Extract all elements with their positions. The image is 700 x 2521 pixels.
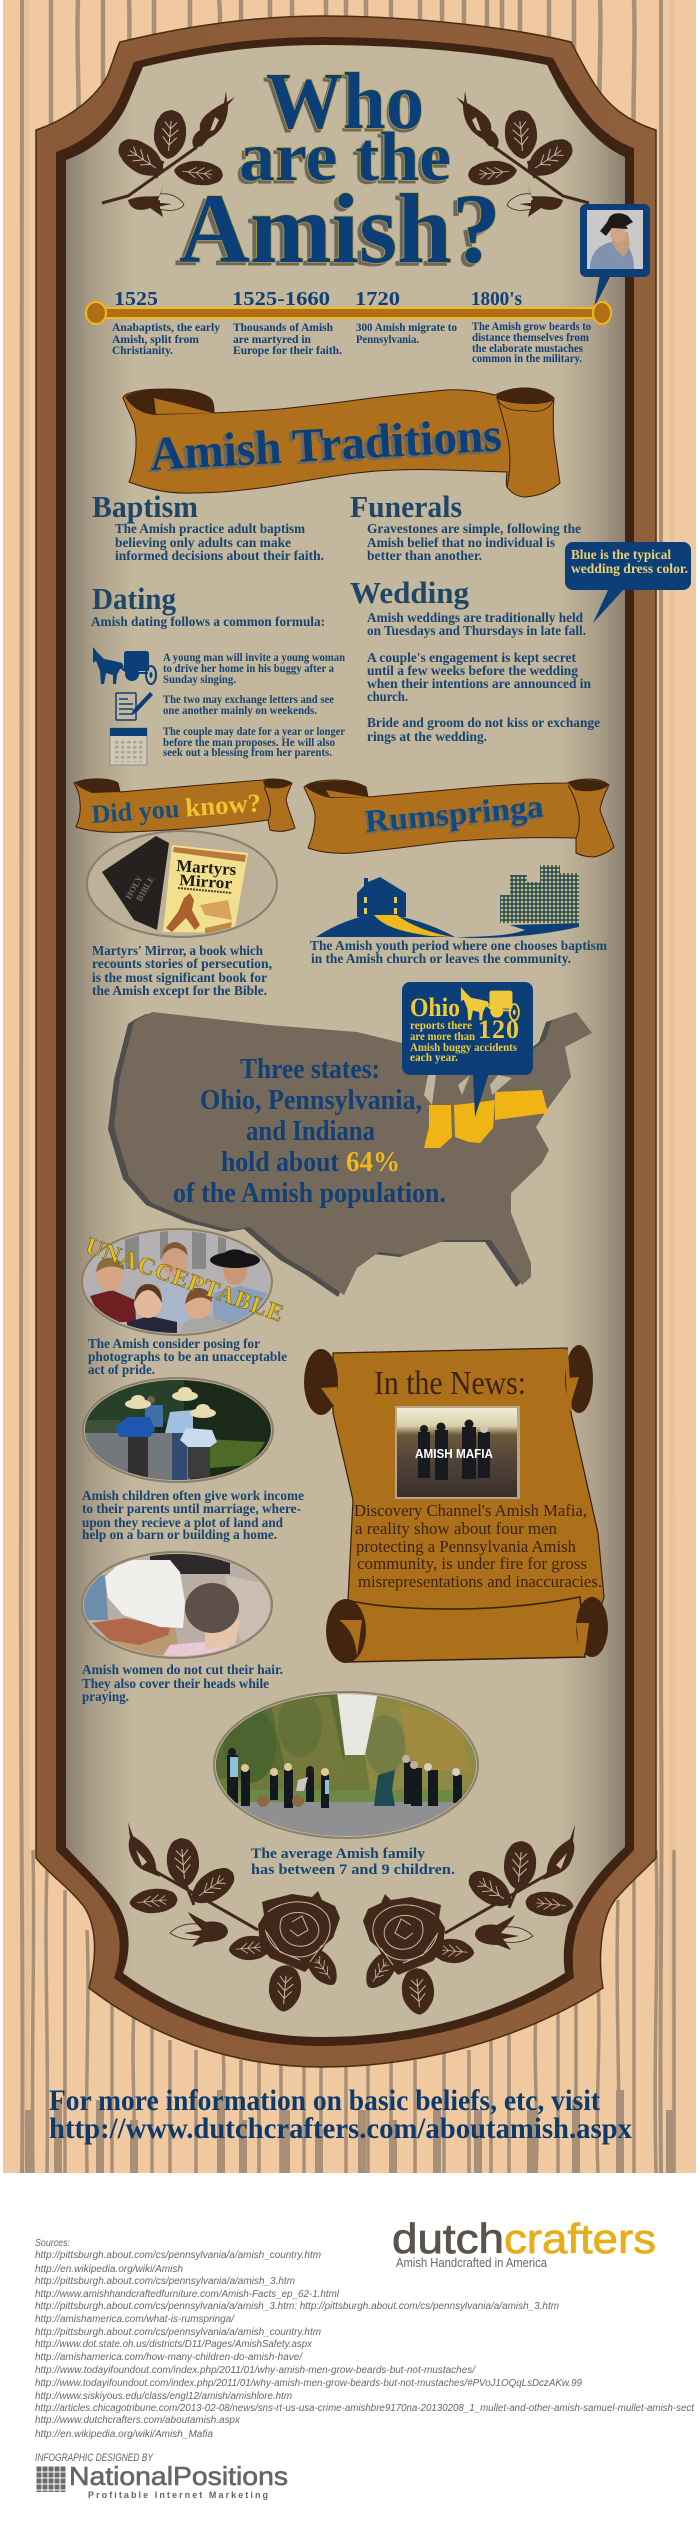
text block: hair: Amish women do not cut their hair.: [82, 1663, 283, 1678]
dating step 2: The two may exchange letters and see: [163, 692, 335, 706]
timeline event 1720: [355, 288, 457, 346]
scroll body text: a reality show about four men: [355, 1519, 557, 1538]
callout: blue wedding dress: [565, 542, 691, 623]
photo: Holy Bible and Martyrs' Mirror: Mirror: [179, 872, 233, 893]
text block: sources: http://www.amishhandcraftedfurniture.com/Amish-Facts_ep_62-1.html: [35, 2289, 340, 2300]
dating step 3: The couple may date for a year or longer: [163, 724, 346, 738]
timeline event 1800's: distance themselves from: [472, 330, 589, 344]
timeline event 1525: 1525: [114, 288, 158, 310]
panel: wooden sign frame: [36, 16, 656, 2067]
dating step 1: A young man will invite a young woman: [163, 650, 345, 664]
panel: In the News scroll: [304, 1345, 608, 1663]
text block: Wedding: A couple's engagement is kept secret: [367, 651, 576, 666]
callout: blue wedding dress: Blue is the typical: [571, 548, 671, 563]
photo: prayer covering: [82, 1552, 272, 1660]
text block: sources: http://en.wikipedia.org/wiki/Amish: [35, 2264, 183, 2275]
timeline event 1525: Amish, split from: [112, 332, 199, 346]
text block: Martyrs' Mirror: [92, 944, 272, 999]
timeline event 1800's: The Amish grow beards to: [472, 319, 591, 333]
heading: Did you know?: [90, 788, 262, 829]
timeline event 1525: [112, 288, 220, 357]
dating step 1: to drive her home in his buggy after a: [163, 661, 334, 675]
heading: Amish Traditions: Amish Traditions: [146, 411, 500, 483]
icon: left rose sprig ornament: [102, 91, 235, 217]
timeline event 1525-1660: Thousands of Amish: [233, 320, 333, 334]
callout: blue wedding dress: wedding dress color.: [571, 562, 688, 577]
text block: sources: http://www.siskiyous.edu/class/engl12/amish/amishlore.htm: [35, 2391, 292, 2402]
photo: Holy Bible and Martyrs' Mirror: BIBLE: [134, 874, 156, 903]
text block: sources: http://pittsburgh.about.com/cs/pennsylvania/a/amish_country.htm: [35, 2327, 321, 2338]
photo: Amish Mafia: [395, 1406, 520, 1499]
title: Amish?: [175, 176, 497, 287]
text block: Wedding: on Tuesdays and Thursdays in late fall.: [367, 624, 586, 639]
icon: right rose branch: [359, 1825, 584, 2016]
scroll body text: community, is under fire for gross: [357, 1554, 587, 1573]
timeline event 1800's: 1800's: [471, 288, 522, 310]
text block: family size: The average Amish family: [251, 1846, 426, 1862]
highlighted states: [424, 1090, 548, 1148]
scroll body text: [354, 1501, 602, 1591]
dating step 1: [163, 650, 345, 686]
text block: sources: [35, 2238, 695, 2440]
text block: Wedding: until a few weeks before the wedding: [367, 664, 578, 679]
map caption: Ohio, Pennsylvania,: [200, 1084, 422, 1116]
photo: Holy Bible and Martyrs' Mirror: [87, 831, 277, 937]
heading: Rumspringa: Rumspringa: [363, 788, 545, 839]
text block: Baptism: informed decisions about their faith.: [115, 549, 324, 564]
banner: Rumspringa: [304, 779, 614, 857]
text block: Wedding: Wedding: [350, 575, 469, 610]
dating step 3: seek out a blessing from her parents.: [163, 745, 332, 759]
text block: children income: to their parents until marriage, where-: [82, 1502, 301, 1517]
timeline: [86, 288, 611, 365]
logo: dutchcrafters: dutch: [392, 2215, 504, 2262]
timeline event 1525-1660: are martyred in: [233, 332, 311, 346]
text block: photographs: act of pride.: [88, 1363, 155, 1378]
text block: Wedding: rings at the wedding.: [367, 730, 487, 745]
text block: children income: upon they recieve a plot of land and: [82, 1516, 283, 1531]
text block: sources: http://www.todayifoundout.com/index.php/2011/01/why-amish-men-grow-beards-but-not-mustaches/#PVoJ1OQqLsDczAKw.99: [35, 2378, 582, 2389]
timeline event 1720: 1720: [355, 288, 400, 310]
text block: sources: http://www.dot.state.oh.us/districts/D11/Pages/AmishSafety.aspx: [35, 2339, 313, 2350]
icon: house on hill and city: [316, 865, 579, 938]
credit: National Positions: Profitable Internet Marketing: [88, 2490, 268, 2500]
text block: sources: http://articles.chicagotribune.com/2013-02-08/news/sns-rt-us-usa-crime-amishbre9170na-20130208_1_mullet-and-other-amish-samuel-mullet-amish-sect: [35, 2403, 695, 2414]
callout: Ohio buggy accidents: [402, 982, 533, 1117]
text block: Dating: Dating: [92, 581, 176, 616]
text block: Martyrs' Mirror: the Amish except for the Bible.: [92, 984, 267, 999]
footer call to action: http://www.dutchcrafters.com/aboutamish.aspx: [49, 2112, 632, 2145]
text block: Martyrs' Mirror: recounts stories of persecution,: [92, 957, 272, 972]
text block: Funerals: Funerals: [350, 489, 462, 524]
text block: photographs: photographs to be an unacceptable: [88, 1350, 287, 1365]
text block: Baptism: The Amish practice adult baptism: [115, 522, 305, 537]
footer call to action: [49, 2084, 632, 2145]
text block: Rumspringa: The Amish youth period where one chooses baptism: [310, 939, 607, 954]
text block: sources: http://en.wikipedia.org/wiki/Amish_Mafia: [35, 2429, 213, 2440]
icon: yellow buggy: [461, 987, 519, 1020]
banner: Did you know?: [74, 779, 295, 832]
logo: dutchcrafters: crafters: [504, 2215, 656, 2262]
title: Amish?: [179, 173, 501, 284]
dating step 3: before the man proposes. He will also: [163, 735, 335, 749]
heading: In the News: In the News:: [374, 1365, 526, 1402]
dating step 2: [163, 692, 335, 717]
text block: Wedding: church.: [367, 690, 408, 705]
dating step 2: one another mainly on weekends.: [163, 703, 317, 717]
text block: Funerals: better than another.: [367, 549, 482, 564]
timeline event 1525: Anabaptists, the early: [112, 320, 220, 334]
text block: children income: help on a barn or building a home.: [82, 1528, 277, 1543]
callout: Ohio buggy accidents: each year.: [410, 1050, 458, 1064]
text block: Dating: Amish dating follows a common formula:: [91, 615, 325, 630]
timeline event 1525-1660: [232, 288, 342, 357]
heading: Amish Traditions: Amish Traditions: [149, 408, 503, 481]
timeline event 1525: Christianity.: [112, 343, 173, 357]
photo: Amish Mafia: AMISH MAFIA: [415, 1446, 494, 1461]
title: [175, 58, 501, 287]
credit: National Positions: NationalPositions: [69, 2461, 288, 2491]
map caption: Three states:: [240, 1053, 380, 1085]
text block: family size: [251, 1846, 455, 1878]
dating step 1: Sunday singing.: [163, 672, 236, 686]
text block: Dating: [91, 581, 346, 765]
text block: Baptism: Baptism: [92, 489, 198, 524]
logo: dutchcrafters: Amish Handcrafted in America: [396, 2255, 548, 2270]
text block: Funerals: Gravestones are simple, following the: [367, 522, 581, 537]
text block: photographs: The Amish consider posing for: [88, 1337, 260, 1352]
timeline event 1525-1660: 1525-1660: [232, 288, 330, 310]
text block: Wedding: Amish weddings are traditionally held: [367, 611, 583, 626]
text block: sources: http://www.dutchcrafters.com/aboutamish.aspx: [35, 2415, 241, 2426]
text block: hair: [82, 1663, 283, 1705]
timeline bar: [86, 302, 611, 324]
photo: Holy Bible and Martyrs' Mirror: Martyrs: [176, 856, 237, 879]
text block: sources: http://pittsburgh.about.com/cs/pennsylvania/a/amish_3.htm: http://pittsburgh.about.com/cs/pennsylvania/a/amish_3.htm: [35, 2301, 559, 2312]
title: Who: [266, 58, 424, 146]
timeline event 1720: 300 Amish migrate to: [356, 320, 457, 334]
text block: sources: Sources:: [35, 2238, 70, 2249]
title: Who: [263, 61, 423, 149]
icon: horse and buggy: [93, 647, 156, 684]
icon: calendar: [110, 728, 147, 765]
text block: sources: http://amishamerica.com/how-many-children-do-amish-have/: [35, 2352, 303, 2363]
text block: Wedding: Bride and groom do not kiss or exchange: [367, 716, 600, 731]
map caption: of the Amish population.: [173, 1177, 446, 1209]
text block: family size: has between 7 and 9 children.: [251, 1862, 455, 1878]
text block: children income: [82, 1489, 304, 1543]
text block: Baptism: [92, 489, 324, 564]
text block: Martyrs' Mirror: is the most significant book for: [92, 971, 267, 986]
logo: dutchcrafters: [392, 2215, 656, 2270]
map: United States: [108, 1012, 592, 1297]
timeline event 1800's: the elaborate mustaches: [472, 341, 583, 355]
title: are the: [236, 122, 448, 199]
timeline event 1525-1660: Europe for their faith.: [233, 343, 342, 357]
map caption: and Indiana: [246, 1115, 375, 1147]
map caption: 64%: [346, 1146, 400, 1178]
scroll body text: Discovery Channel's Amish Mafia,: [354, 1501, 587, 1520]
callout: Amish man portrait: [580, 204, 650, 308]
text block: Funerals: [350, 489, 581, 564]
callout: Ohio buggy accidents: Ohio: [410, 993, 460, 1022]
text block: sources: http://pittsburgh.about.com/cs/pennsylvania/a/amish_country.htm: [35, 2250, 321, 2261]
icon: National Positions logo grid: [36, 2466, 66, 2492]
photo: Amish boys walking: [83, 1378, 274, 1485]
map caption: [173, 1053, 446, 1209]
credit: National Positions: INFOGRAPHIC DESIGNED BY: [35, 2452, 154, 2464]
text block: children income: Amish children often give work income: [82, 1489, 304, 1504]
footer call to action: For more information on basic beliefs, etc, visit: [49, 2084, 600, 2117]
text block: sources: http://www.todayifoundout.com/index.php/2011/01/why-amish-men-grow-beards-but-not-mustaches/: [35, 2365, 476, 2376]
title: are the: [239, 119, 451, 196]
callout: Ohio buggy accidents: 120: [478, 1015, 519, 1044]
heading: Did you know?: know?: [184, 788, 262, 822]
text block: sources: http://pittsburgh.about.com/cs/pennsylvania/a/amish_3.htm: [35, 2276, 295, 2287]
timeline event 1800's: [471, 288, 591, 365]
text block: Baptism: believing only adults can make: [115, 536, 291, 551]
text block: Funerals: Amish belief that no individual is: [367, 536, 556, 551]
icon: letter and pen: [116, 692, 153, 720]
icon: left rose branch: [119, 1822, 344, 2013]
decorative lake shapes: [424, 1075, 512, 1105]
icon: right rose sprig ornament: [456, 91, 589, 217]
text block: Rumspringa: in the Amish church or leaves the community.: [311, 952, 571, 967]
callout: Ohio buggy accidents: reports there: [410, 1018, 473, 1032]
photo: Amish family walking: [214, 1692, 479, 1842]
photo: group posing with UNACCEPTABLE stamp: [82, 1229, 287, 1335]
scroll body text: protecting a Pennsylvania Amish: [356, 1537, 576, 1556]
callout: Ohio buggy accidents: are more than: [410, 1029, 475, 1043]
text block: sources: http://amishamerica.com/what-is-rumspringa/: [35, 2314, 235, 2325]
timeline event 1800's: common in the military.: [472, 351, 582, 365]
text block: hair: praying.: [82, 1690, 129, 1705]
text block: Martyrs' Mirror: Martyrs' Mirror, a book which: [92, 944, 263, 959]
heading: Rumspringa: Rumspringa: [362, 790, 543, 841]
photo: Holy Bible and Martyrs' Mirror: HOLY: [123, 873, 145, 901]
scroll body text: misrepresentations and inaccuracies.: [358, 1572, 602, 1591]
map caption: hold about: [221, 1146, 339, 1178]
dating step 3: [163, 724, 346, 759]
text block: Wedding: [350, 575, 600, 745]
banner: Amish Traditions: [123, 388, 560, 497]
callout: Ohio buggy accidents: Amish buggy accidents: [410, 1040, 517, 1054]
credit: National Positions: [35, 2452, 288, 2500]
heading: Did you know?: Did you: [90, 794, 180, 829]
text block: Rumspringa: [310, 939, 607, 967]
text block: hair: They also cover their heads while: [82, 1677, 269, 1692]
stamp text: UNACCEPTABLE: [82, 1233, 287, 1327]
timeline event 1720: Pennsylvania.: [356, 332, 419, 346]
text block: Wedding: when their intentions are announced in: [367, 677, 591, 692]
text block: photographs: [88, 1337, 287, 1378]
